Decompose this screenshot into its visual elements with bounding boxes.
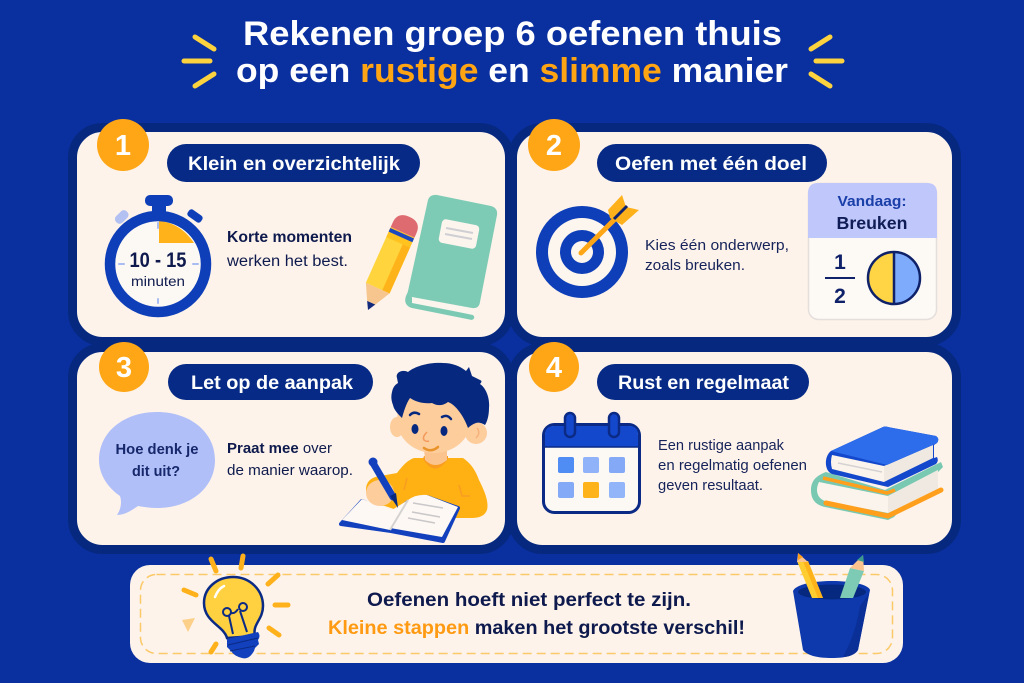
heading pill 1: Klein en overzichtelijk xyxy=(188,154,400,175)
icon: stopwatch: 10 - 15 xyxy=(130,249,187,272)
text: closing message: Oefenen hoeft niet perfect te zijn. xyxy=(367,589,691,611)
text: korte momenten: Korte momenten xyxy=(227,229,352,246)
icon: half circle xyxy=(868,252,920,304)
icon: pencil xyxy=(356,212,421,315)
icon: stack of books xyxy=(811,426,943,520)
text: korte momenten xyxy=(226,229,352,270)
icon: blue pen xyxy=(368,458,398,508)
icon: target with dart xyxy=(536,195,639,298)
speech bubble xyxy=(99,412,215,515)
number badge 4: 4 xyxy=(546,352,562,384)
panel: oefen met een doel xyxy=(512,119,956,342)
heading pill 3: Let op de aanpak xyxy=(191,373,353,394)
fraction one half: 2 xyxy=(834,285,846,308)
speech bubble: Hoe denk je xyxy=(116,441,198,458)
title: op een rustige en slimme manier xyxy=(236,52,788,90)
open notebook xyxy=(341,495,458,541)
number badge 2: 2 xyxy=(546,130,562,162)
number badge 1 xyxy=(97,119,149,171)
sweater xyxy=(366,458,488,518)
text: praat mee: de manier waarop. xyxy=(227,462,353,479)
speech bubble: dit uit? xyxy=(132,463,180,480)
icon: stopwatch: minuten xyxy=(131,273,185,289)
icon: green book xyxy=(405,195,497,320)
number badge 4 xyxy=(529,342,579,392)
text: closing message xyxy=(328,589,745,639)
heading pill 1 xyxy=(167,144,420,182)
heading pill 4 xyxy=(597,364,809,400)
face xyxy=(397,387,471,453)
text: een rustige aanpak: en regelmatig oefenen xyxy=(658,457,807,474)
hair xyxy=(391,363,489,428)
icon: right title sparkle xyxy=(811,37,842,86)
fraction one half xyxy=(825,251,855,308)
card: vandaag breuken: Breuken xyxy=(836,213,908,233)
text: een rustige aanpak: Een rustige aanpak xyxy=(658,437,784,454)
illustration: child writing xyxy=(341,363,489,541)
icon: calendar xyxy=(544,413,640,512)
number badge 3: 3 xyxy=(116,352,132,384)
card: vandaag breuken xyxy=(808,183,937,320)
number badge 2 xyxy=(528,119,580,171)
text: een rustige aanpak: geven resultaat. xyxy=(658,477,763,494)
text: praat mee: Praat mee over xyxy=(227,440,332,457)
title xyxy=(236,15,788,90)
icon: light bulb xyxy=(182,556,288,658)
card: vandaag breuken: Vandaag: xyxy=(838,193,906,210)
panel: bottom message banner xyxy=(130,553,903,663)
heading pill 4: Rust en regelmaat xyxy=(618,373,790,394)
text: kies een onderwerp: Kies één onderwerp, xyxy=(645,237,789,254)
text: korte momenten: werken het best. xyxy=(226,253,348,270)
heading pill 2 xyxy=(597,144,827,182)
icon: left title sparkle xyxy=(184,37,214,86)
ears xyxy=(390,417,404,437)
fraction one half: 1 xyxy=(834,251,846,274)
number badge 1: 1 xyxy=(115,130,131,162)
text: kies een onderwerp: zoals breuken. xyxy=(645,257,745,274)
number badge 3 xyxy=(99,342,149,392)
panel: rust en regelmaat xyxy=(512,342,956,550)
heading pill 2: Oefen met één doel xyxy=(615,154,807,175)
text: kies een onderwerp xyxy=(645,237,789,274)
text: closing message: Kleine stappen maken het grootste verschil! xyxy=(328,617,745,639)
panel: klein en overzichtelijk xyxy=(72,119,510,342)
title: Rekenen groep 6 oefenen thuis xyxy=(243,15,782,53)
icon: pencil cup xyxy=(793,553,870,658)
panel: let op de aanpak xyxy=(72,342,510,550)
hand xyxy=(366,480,394,506)
text: een rustige aanpak xyxy=(658,437,807,494)
heading pill 3 xyxy=(168,364,373,400)
icon: stopwatch xyxy=(110,195,206,312)
text: praat mee xyxy=(227,440,353,479)
